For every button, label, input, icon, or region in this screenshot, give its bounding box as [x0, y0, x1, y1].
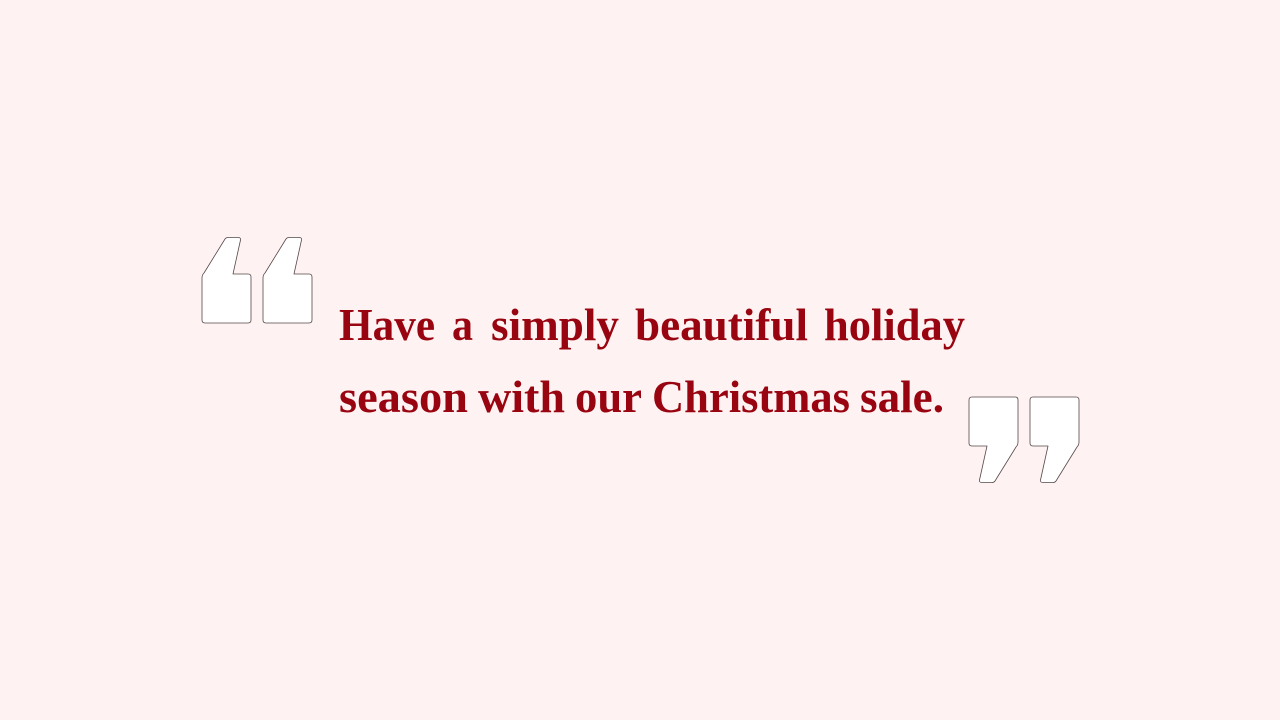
quote text: Christmas — [652, 371, 850, 422]
quote text: a — [452, 299, 473, 350]
icon: opening quotation mark — [202, 238, 312, 323]
quote text — [339, 299, 965, 422]
quote text: Have — [339, 299, 435, 350]
quote text: holiday — [824, 299, 965, 350]
quote text: with — [478, 371, 565, 422]
quote text: season — [339, 371, 468, 422]
icon: closing quotation mark — [969, 397, 1079, 482]
quote text: our — [575, 371, 642, 422]
quote text: sale. — [860, 371, 944, 422]
quote text: simply — [491, 299, 619, 350]
quote text: beautiful — [635, 299, 808, 350]
